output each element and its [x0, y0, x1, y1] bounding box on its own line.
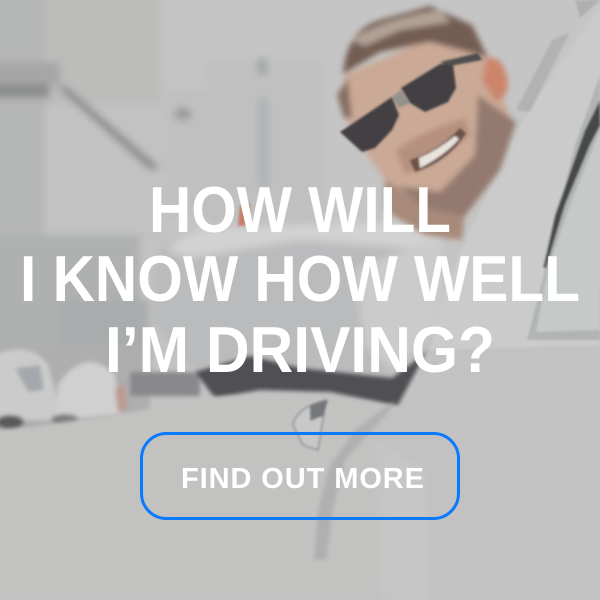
- skin: [342, 38, 512, 213]
- car window frame: [430, 0, 600, 350]
- street cars: [0, 345, 150, 430]
- ear: [482, 58, 508, 100]
- sunglasses: [340, 97, 399, 152]
- headline: [20, 173, 580, 386]
- call-to-action button: [142, 434, 458, 518]
- driver's arm and white shirt: [150, 219, 450, 380]
- smile teeth: [410, 128, 466, 172]
- dark door window sill: [195, 350, 430, 408]
- button label: FIND OUT MORE: [181, 463, 424, 495]
- car door panel: [0, 335, 600, 600]
- headline line 1: HOW WILL: [149, 173, 451, 246]
- man's face: [337, 6, 516, 240]
- beard: [398, 95, 516, 216]
- red reflection behind headline: [238, 203, 250, 226]
- car wing mirror: [293, 400, 328, 450]
- sky: [150, 0, 600, 280]
- headline line 3: I’M DRIVING?: [105, 313, 495, 386]
- hair: [343, 6, 488, 75]
- neck: [385, 180, 465, 240]
- left buildings: [0, 0, 50, 320]
